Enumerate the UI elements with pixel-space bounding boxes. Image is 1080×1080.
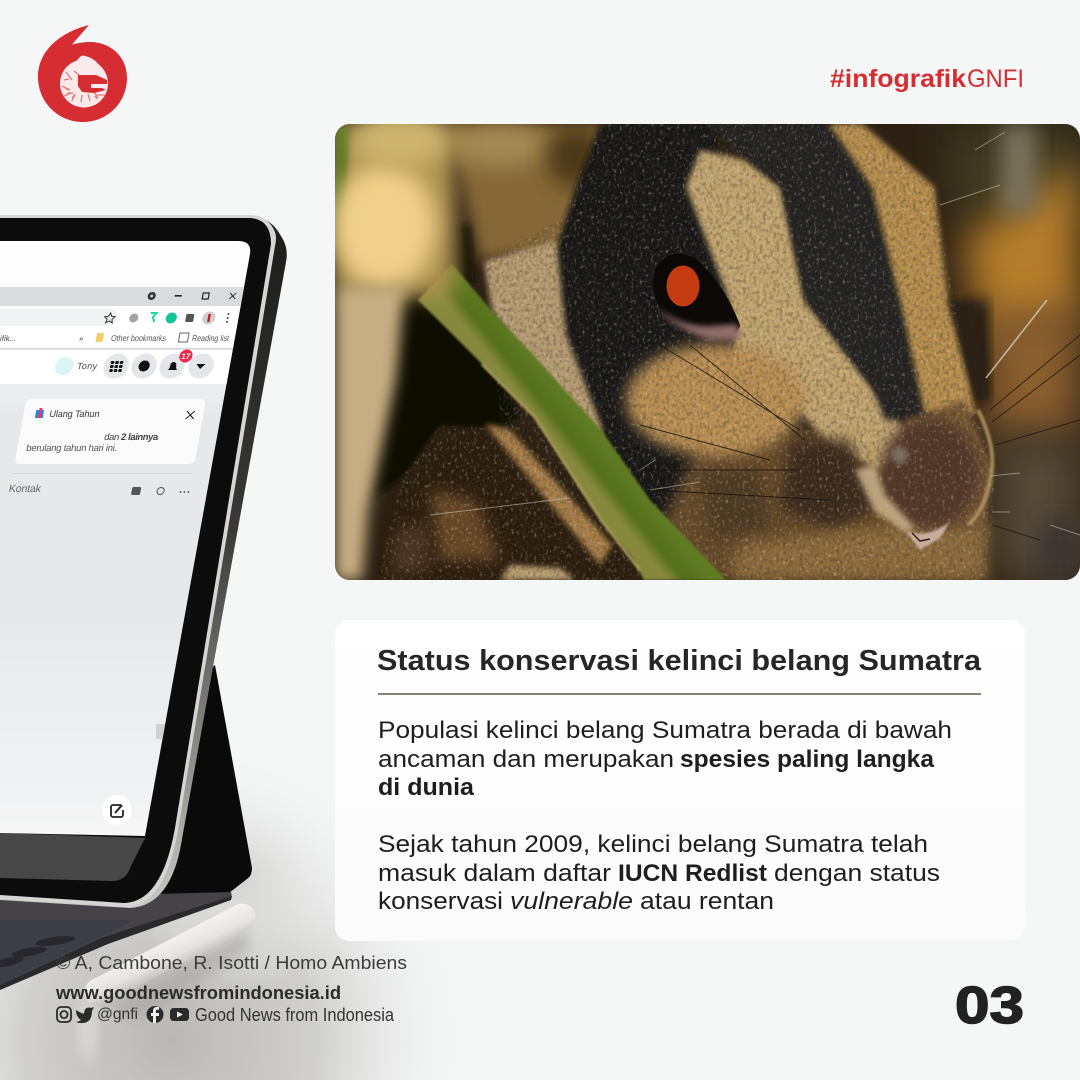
- browser interface: Reading list: [191, 333, 231, 343]
- paragraph one: [378, 717, 952, 801]
- snout highlights: [855, 410, 992, 550]
- eye: [653, 254, 742, 340]
- browser interface: 17: [181, 352, 192, 361]
- paragraph one: Populasi kelinci belang Sumatra berada di bawah: [378, 717, 952, 744]
- lower muzzle: [730, 520, 990, 580]
- tablet silver edge: [0, 215, 276, 907]
- social media row: [57, 1005, 395, 1025]
- browser interface: Kontak: [8, 483, 43, 495]
- paragraph two: masuk dalam daftar: [378, 860, 611, 887]
- text panel: [335, 620, 1025, 941]
- tan centre stripe: [686, 150, 915, 470]
- lower body fur: [373, 421, 614, 580]
- logo: [38, 25, 127, 122]
- icon: instagram: [57, 1007, 71, 1022]
- compose button: [102, 795, 132, 825]
- icon: facebook: [146, 1006, 164, 1023]
- paragraph two: vulnerable: [510, 888, 633, 915]
- tan band left: [484, 240, 602, 445]
- photo credit: © A, Cambone, R. Isotti / Homo Ambiens: [56, 952, 407, 973]
- hashtag: #infografik: [830, 65, 966, 93]
- tan right stripe: [829, 124, 975, 415]
- birthday card: [14, 399, 206, 464]
- whisker pad: [780, 440, 875, 530]
- birthday card: berulang tahun hari ini.: [25, 443, 118, 454]
- cheek patch: [626, 344, 806, 456]
- lower screen area: [0, 833, 145, 881]
- rabbit face: [450, 123, 993, 580]
- nose: [880, 418, 980, 528]
- tablet rear cover: [0, 216, 287, 908]
- dark top stripe: [705, 124, 925, 420]
- birthday card: Ulang Tahun: [48, 409, 100, 420]
- whiskers: [430, 132, 1080, 540]
- panel heading: Status konservasi kelinci belang Sumatra: [377, 645, 982, 677]
- icon: youtube: [170, 1008, 189, 1021]
- browser interface: »: [78, 334, 85, 343]
- paragraph one: di dunia: [378, 774, 474, 801]
- paragraph two: atau rentan: [640, 888, 774, 915]
- dark eye band: [555, 124, 806, 516]
- social media row: @gnfi: [97, 1006, 138, 1023]
- screen: [0, 241, 250, 836]
- website: www.goodnewsfromindonesia.id: [55, 982, 341, 1003]
- browser interface: [0, 287, 244, 495]
- paragraph two: dengan status: [774, 860, 940, 887]
- browser interface: Tony: [76, 361, 98, 371]
- hollow behind the face: [370, 290, 520, 500]
- hashtag: GNFI: [967, 65, 1024, 93]
- paragraph two: IUCN Redlist: [618, 860, 767, 887]
- green leaf: [418, 264, 726, 580]
- browser interface: Other bookmarks: [110, 333, 167, 343]
- paragraph one: spesies paling langka: [680, 746, 934, 773]
- lower facial fur base: [660, 420, 990, 580]
- page number: 03: [955, 977, 1024, 1035]
- paragraph two: Sejak tahun 2009, kelinci belang Sumatra telah: [378, 831, 928, 858]
- social media row: Good News from Indonesia: [195, 1005, 395, 1025]
- birthday card: dan 2 lainnya: [103, 432, 160, 443]
- tablet stand: [130, 665, 252, 905]
- paragraph one: ancaman dan merupakan: [378, 746, 674, 773]
- blurred grass stalk: [332, 112, 455, 580]
- stylus pen: [80, 917, 250, 1062]
- hashtag: [830, 65, 1024, 93]
- blurred background: [950, 124, 1080, 580]
- tablet black bezel: [0, 218, 271, 903]
- tablet illustration: [0, 215, 302, 1062]
- paragraph two: [378, 831, 940, 915]
- photo: Sumatran striped rabbit: [332, 112, 1080, 580]
- keyboard: [0, 892, 232, 990]
- icon: twitter: [76, 1007, 94, 1023]
- paragraph two: konservasi: [378, 888, 503, 915]
- fur texture: [370, 124, 1000, 580]
